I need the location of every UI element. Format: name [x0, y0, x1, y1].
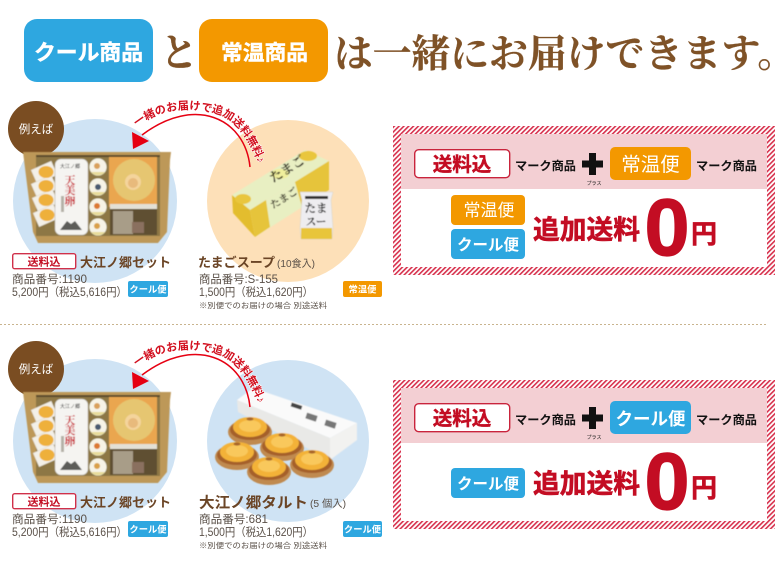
product info: たまごスープ: 商品番号:S-155 [199, 273, 278, 286]
product info: 大江ノ郷タルト: ※別便でのお届けの場合 別途送料 [199, 540, 327, 550]
product info: 大江ノ郷セット: 送料込 [28, 254, 60, 268]
product info: 大江ノ郷タルト: (5 個入) [310, 497, 346, 510]
badge: 例えば [8, 341, 64, 397]
text: 追加送料0円: 0 [644, 183, 690, 273]
arrow: free shipping arc: 一緒のお届けで追加送料無料♪ [134, 100, 265, 162]
badge: クール便 [451, 468, 525, 498]
badge: クール商品 [24, 19, 153, 82]
photo: たまごスープ box: スー [306, 217, 326, 228]
product info: 大江ノ郷セット: 5,200円（税込5,616円） [12, 285, 127, 299]
badge: 例えば: 例えば [19, 122, 54, 136]
photo: 大江ノ郷セット gift box: 天 [64, 174, 76, 187]
badge: 常温便 [610, 147, 691, 180]
badge: クール便: クール便 [457, 236, 519, 254]
product info: 大江ノ郷タルト: 商品番号:681 [199, 513, 268, 526]
photo: 大江ノ郷セット gift box: 卵 [64, 194, 76, 208]
heading word: と: と [160, 33, 198, 75]
product info: たまごスープ: たまごスープ [198, 255, 275, 270]
photo: 大江ノ郷セット gift box [23, 392, 171, 483]
photo: 大江ノ郷セット gift box: 大江ノ郷 [60, 163, 80, 170]
panel: example 1 shipping rule [393, 126, 775, 275]
badge: 常温商品 [199, 19, 328, 82]
photo: たまごスープ box: たまご [267, 152, 308, 186]
product info: 大江ノ郷タルト: 大江ノ郷タルト [199, 494, 308, 512]
text: マーク商品: マーク商品 [515, 158, 576, 173]
photo: 大江ノ郷セット gift box: 卵 [64, 434, 76, 448]
text: 追加送料0円: 0 [644, 437, 690, 527]
badge: クール便 [610, 401, 691, 434]
photo: たまごスープ box: たまご [268, 185, 300, 212]
badge: クール便: クール便 [457, 475, 519, 493]
badge: クール便: クール便 [616, 409, 686, 429]
badge: 送料込 [415, 404, 510, 432]
product info: 大江ノ郷セット: 商品番号:1190 [12, 513, 87, 526]
photo: 大江ノ郷セット gift box: 大江ノ郷 [60, 403, 80, 410]
arrow: free shipping arc: 一緒のお届けで追加送料無料♪ [134, 340, 264, 402]
text: 追加送料0円 [533, 437, 717, 527]
photo: 大江ノ郷セット gift box: 天 [64, 414, 76, 427]
text: 追加送料0円: 円 [691, 219, 717, 249]
product info: 大江ノ郷セット [12, 494, 171, 539]
text: 追加送料0円 [533, 183, 717, 273]
badge: 常温便: 常温便 [464, 201, 514, 220]
photo: たまごスープ box [232, 150, 333, 239]
product info: 大江ノ郷セット: 送料込 [28, 494, 60, 508]
text: 追加送料0円: 円 [691, 473, 717, 503]
text: マーク商品: マーク商品 [696, 412, 757, 427]
divider [0, 324, 768, 326]
badge: 例えば: 例えば [19, 362, 54, 376]
badge: クール便 [451, 229, 525, 259]
icon: plus [582, 407, 603, 441]
panel: example 2 shipping rule [393, 380, 775, 529]
panel: example 1 products [8, 100, 382, 310]
icon: plus: プラス [587, 181, 601, 187]
product info: 大江ノ郷タルト: 1,500円（税込1,620円） [199, 525, 313, 539]
photo: 大江ノ郷セット gift box: 美 [64, 183, 76, 197]
heading text: は一緒にお届けできます。 [334, 33, 780, 76]
circle: blue backdrop [13, 359, 177, 523]
product info: たまごスープ: 1,500円（税込1,620円） [199, 285, 313, 299]
icon: plus [582, 153, 603, 187]
badge: 例えば [8, 101, 64, 157]
circle: orange backdrop [207, 120, 369, 282]
photo: たまごスープ box: たま [304, 202, 328, 215]
product info: 大江ノ郷セット: クール便 [129, 284, 167, 294]
product info: たまごスープ [198, 255, 382, 310]
product info: 大江ノ郷セット: 5,200円（税込5,616円） [12, 525, 127, 539]
badge: 送料込: 送料込 [433, 154, 492, 176]
text: マーク商品: マーク商品 [515, 412, 576, 427]
circle: blue backdrop [13, 119, 177, 283]
title [24, 19, 780, 82]
product info: たまごスープ: ※別便でのお届けの場合 別途送料 [199, 300, 327, 310]
text: 追加送料0円: 追加送料 [533, 215, 640, 245]
badge: 送料込 [415, 150, 510, 178]
badge: 送料込: 送料込 [433, 408, 492, 430]
product info: 大江ノ郷セット: 商品番号:1190 [12, 273, 87, 286]
photo: 大江ノ郷タルト box and tarts [215, 388, 357, 485]
photo: 大江ノ郷セット gift box: 美 [64, 423, 76, 437]
product info: 大江ノ郷セット [12, 254, 171, 299]
text: 追加送料0円: 追加送料 [533, 469, 640, 499]
product info: たまごスープ: (10食入) [277, 258, 315, 270]
product info: たまごスープ: 常温便 [349, 284, 377, 294]
product info: 大江ノ郷タルト [199, 494, 382, 550]
circle: blue backdrop [207, 360, 369, 522]
badge: 常温便: 常温便 [621, 154, 680, 176]
product info: 大江ノ郷セット: クール便 [129, 524, 167, 534]
panel: example 2 products [8, 340, 382, 550]
photo: 大江ノ郷セット gift box [23, 152, 171, 243]
product info: 大江ノ郷タルト: クール便 [344, 524, 382, 534]
product info: 大江ノ郷セット: 大江ノ郷セット [80, 495, 171, 510]
icon: plus: プラス [587, 435, 601, 441]
text: マーク商品: マーク商品 [696, 158, 757, 173]
badge: 常温商品: 常温商品 [221, 42, 308, 65]
badge: 常温便 [451, 195, 525, 225]
product info: 大江ノ郷セット: 大江ノ郷セット [80, 255, 171, 270]
badge: クール商品: クール商品 [34, 41, 143, 65]
